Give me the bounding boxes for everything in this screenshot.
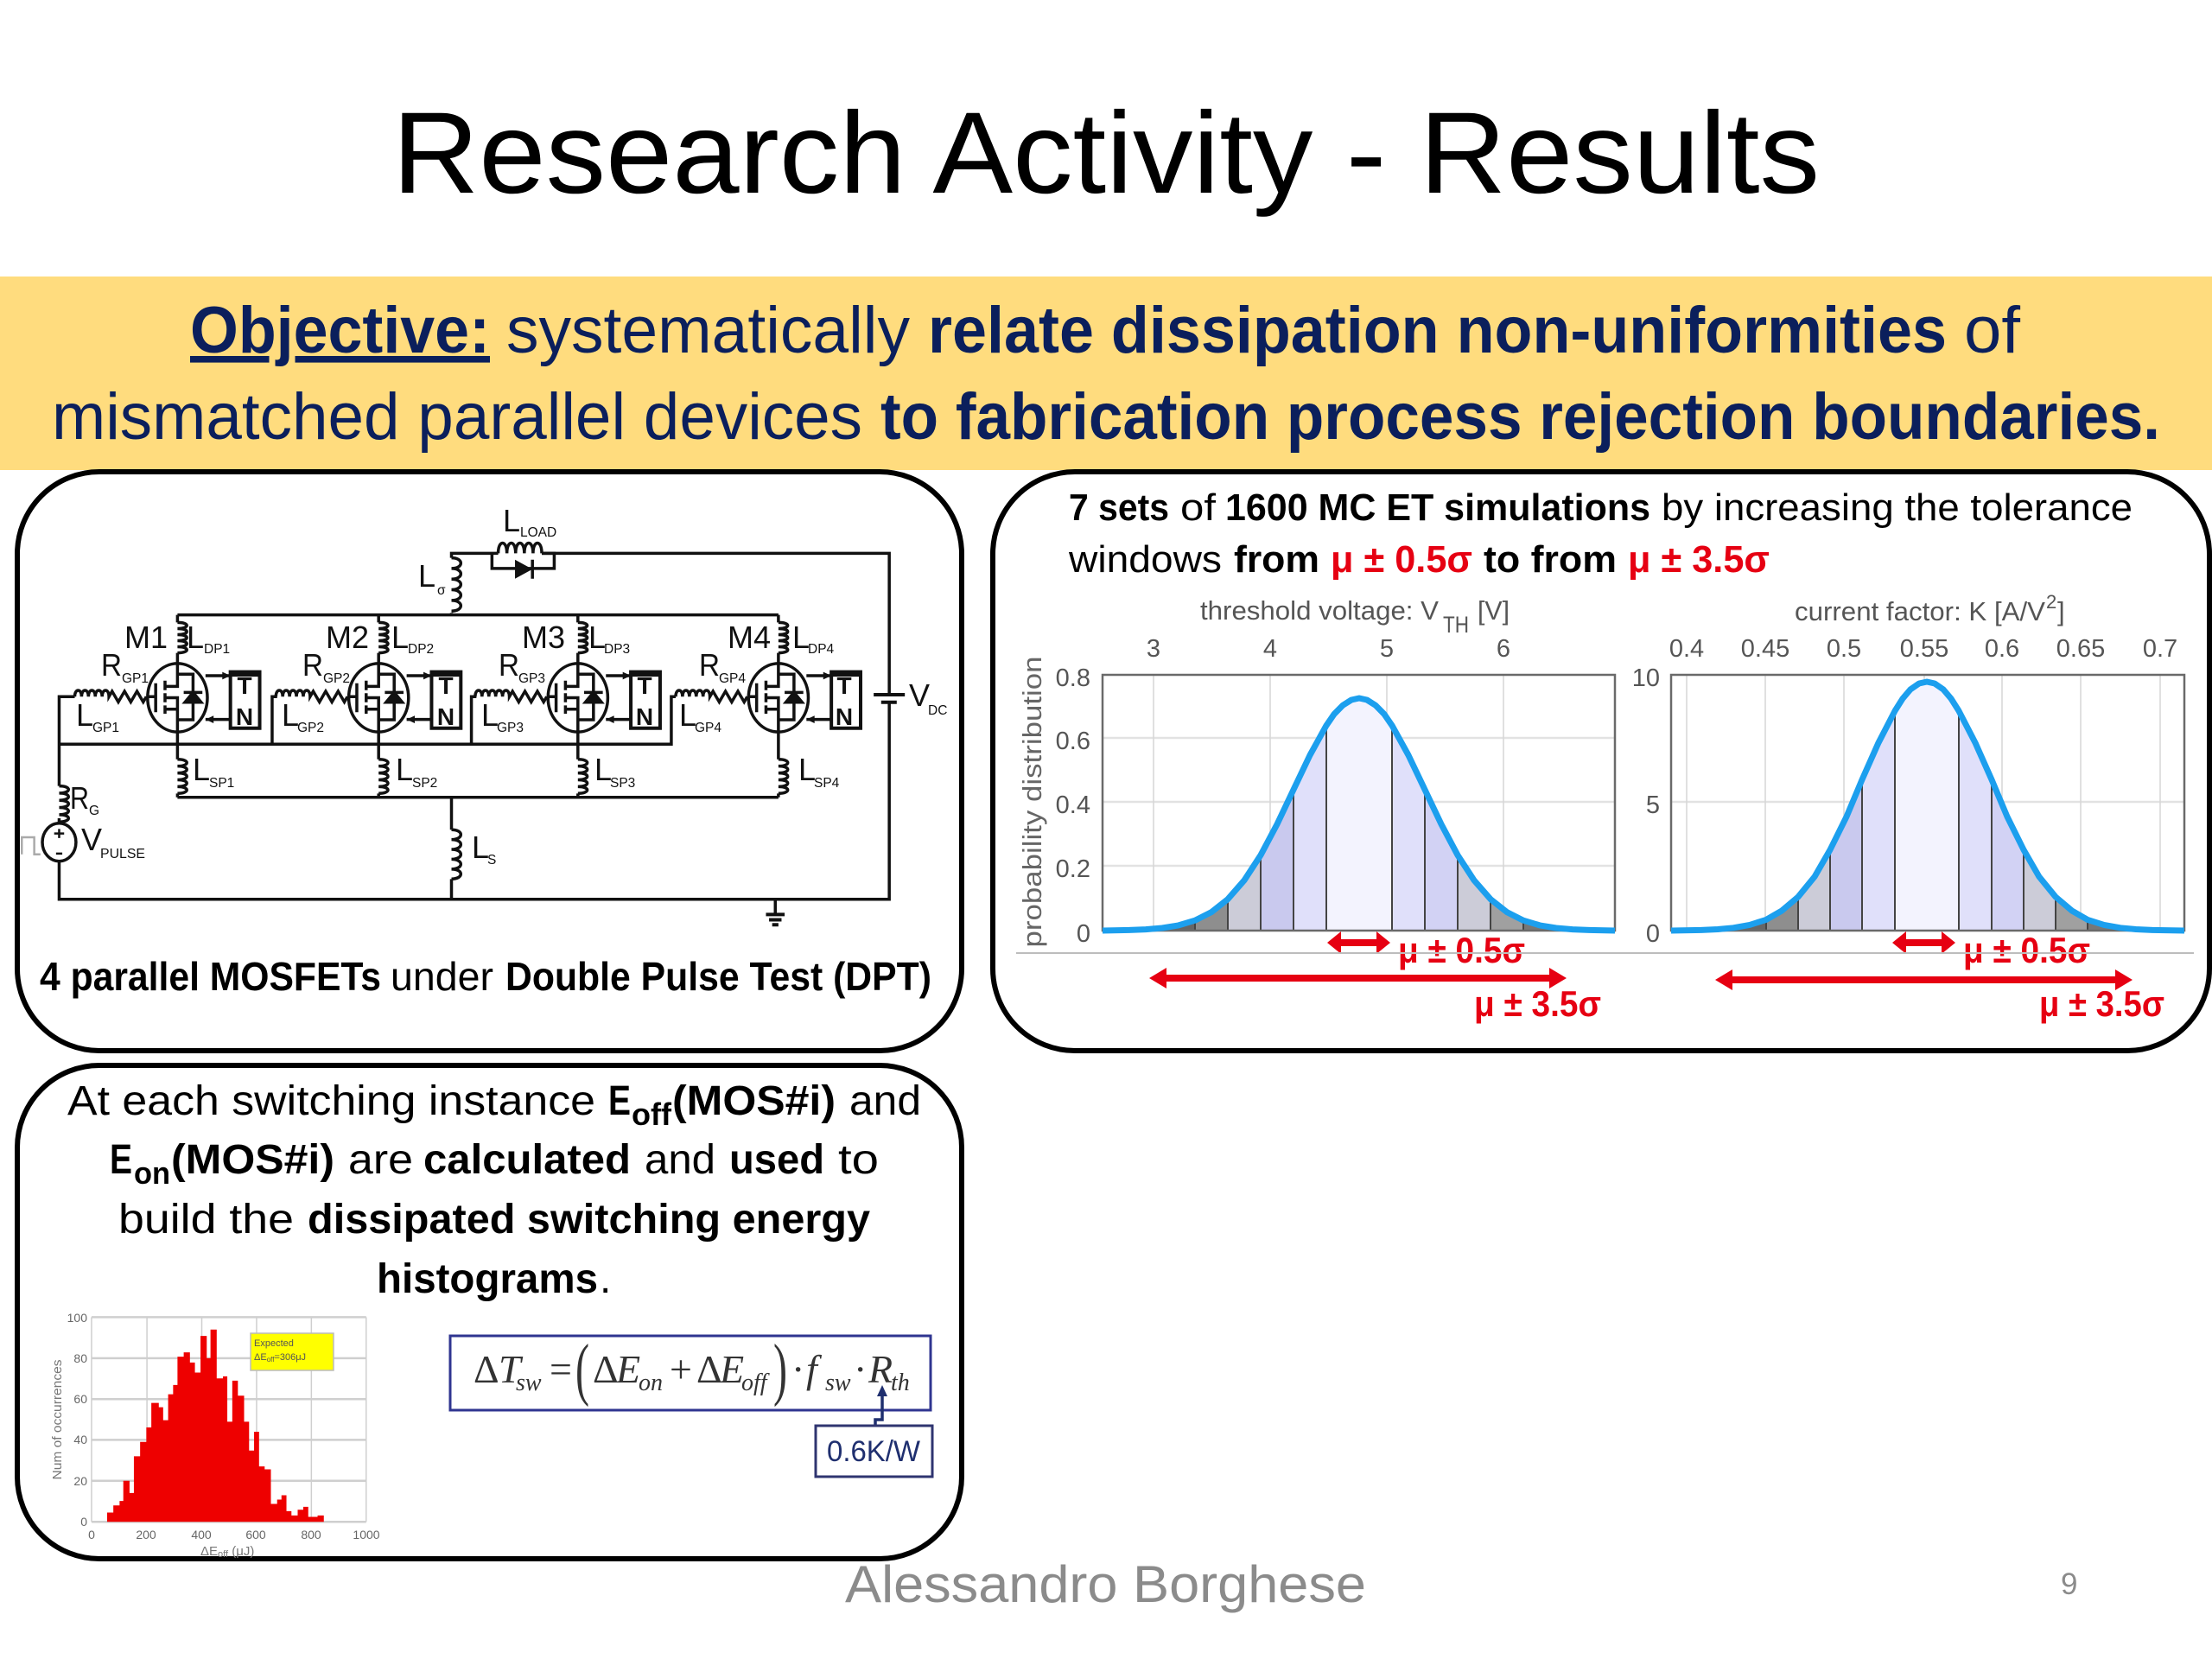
histogram bars — [107, 1330, 324, 1522]
histogram x title: (μJ) — [228, 1544, 254, 1559]
circuit caption: 4 parallel MOSFETs — [40, 954, 381, 999]
gaussian curve — [1671, 682, 2184, 931]
formula box: E — [719, 1347, 744, 1391]
top axis ticks — [1147, 635, 1510, 663]
circuit labels: SP2 — [412, 776, 437, 791]
axis title: current factor: 2 — [2046, 591, 2056, 613]
circuit labels: L — [391, 620, 409, 655]
panel frame — [993, 472, 2209, 1051]
histogram y ticks: 40 — [73, 1433, 87, 1446]
top axis ticks: 0.4 — [1669, 635, 1704, 663]
formula box: off — [741, 1370, 770, 1396]
circuit labels: L — [282, 697, 299, 733]
panel description: dissipated switching energy — [308, 1197, 870, 1243]
objective text: to fabrication process rejection boundaries. — [880, 380, 2160, 454]
histogram grid — [92, 1317, 366, 1522]
circuit labels: L — [588, 620, 606, 655]
circuit labels: R — [499, 647, 519, 683]
y axis ticks: 10 — [1632, 664, 1660, 692]
distribution bands — [1162, 698, 1556, 931]
y axis ticks: 5 — [1646, 791, 1660, 819]
panel description: μ ± 3.5σ — [1628, 538, 1770, 581]
banner: objective — [0, 276, 2212, 470]
histogram x ticks — [88, 1528, 380, 1541]
circuit labels: GP1 — [122, 671, 149, 686]
formula box: ) — [773, 1332, 787, 1408]
objective text: systematically — [506, 294, 910, 367]
panel description: to from — [1484, 538, 1617, 581]
histogram x ticks: 1000 — [353, 1528, 380, 1541]
panel frame — [17, 472, 962, 1051]
y axis ticks: 0.4 — [1056, 791, 1090, 819]
histogram y ticks — [67, 1311, 87, 1529]
panel description: At each switching instance — [67, 1078, 595, 1124]
plot frame — [1671, 675, 2184, 931]
circuit labels — [70, 503, 947, 868]
y axis ticks: 0 — [1077, 920, 1090, 948]
label: 3.5 sigma: μ ± 3.5σ — [2039, 983, 2164, 1024]
panel description — [67, 1078, 921, 1302]
circuit labels: T — [237, 672, 252, 699]
formula box: · — [854, 1347, 867, 1391]
histogram x title: ΔE — [200, 1544, 218, 1559]
arrow: Rth annotation — [875, 1385, 887, 1426]
panel description: 7 sets — [1069, 486, 1169, 529]
circuit labels: GP2 — [297, 721, 324, 735]
top axis ticks: 6 — [1497, 635, 1510, 663]
title: Research Activity - Results — [392, 89, 1820, 218]
circuit labels: GP3 — [497, 721, 524, 735]
panel description: E — [608, 1078, 631, 1124]
circuit labels: T — [836, 672, 852, 699]
circuit labels: M4 — [728, 620, 771, 655]
chart: energy histogram — [50, 1311, 380, 1560]
panel description: 1600 MC ET simulations — [1225, 486, 1650, 529]
chart: threshold voltage distribution — [1017, 595, 1615, 1024]
histogram x ticks: 400 — [191, 1528, 212, 1541]
chart: current factor distribution — [1632, 591, 2184, 1024]
circuit labels: L — [679, 697, 696, 733]
circuit labels: GP1 — [92, 721, 119, 735]
footer: page number: 9 — [2061, 1567, 2077, 1601]
circuit labels: T — [637, 672, 652, 699]
circuit labels: L — [396, 752, 413, 787]
formula box: R — [868, 1347, 893, 1391]
circuit labels: GP4 — [695, 721, 721, 735]
circuit labels: R — [302, 647, 323, 683]
histogram y ticks: 20 — [73, 1474, 87, 1488]
top axis ticks: 0.6 — [1985, 635, 2019, 663]
circuit labels: DP3 — [604, 642, 630, 657]
panel description: to — [838, 1137, 879, 1183]
formula box: sw — [825, 1370, 851, 1396]
grid — [1103, 675, 1615, 931]
panel: Monte Carlo simulations — [993, 472, 2209, 1051]
circuit labels: R — [699, 647, 720, 683]
panel description: . — [600, 1256, 611, 1302]
histogram x title: off — [218, 1549, 229, 1560]
chart baseline rule — [1016, 952, 2194, 954]
circuit labels: M2 — [326, 620, 369, 655]
gaussian curve — [1103, 698, 1615, 931]
formula box — [450, 1332, 931, 1410]
legend note: off — [267, 1356, 275, 1363]
objective text: of — [1964, 294, 2021, 367]
y axis ticks: 0.8 — [1056, 664, 1090, 692]
circuit labels: DC — [928, 703, 947, 718]
formula box: E — [615, 1347, 640, 1391]
formula box: = — [550, 1347, 572, 1391]
circuit caption: Double Pulse Test (DPT) — [505, 954, 931, 999]
value box: thermal resistance: 0.6K/W — [827, 1435, 920, 1468]
circuit labels: L — [798, 752, 816, 787]
circuit labels: N — [437, 703, 454, 730]
panel description: are — [348, 1137, 413, 1183]
circuit labels: M3 — [522, 620, 565, 655]
axis title: threshold voltage — [1200, 595, 1510, 638]
circuit labels: S — [487, 853, 496, 868]
circuit labels: SP3 — [610, 776, 635, 791]
circuit labels: L — [481, 697, 499, 733]
value box: thermal resistance — [816, 1426, 932, 1477]
label: 3.5 sigma: μ ± 3.5σ — [1474, 983, 1601, 1024]
circuit labels: N — [236, 703, 253, 730]
top axis ticks: 0.55 — [1900, 635, 1948, 663]
arrow: 3.5 sigma — [1149, 968, 1567, 988]
circuit labels: V — [909, 677, 930, 713]
y axis ticks: 0.6 — [1056, 728, 1090, 755]
axis title: threshold voltage: TH — [1443, 612, 1469, 638]
circuit labels: L — [76, 697, 93, 733]
circuit labels: R — [101, 647, 122, 683]
top axis ticks: 0.7 — [2143, 635, 2177, 663]
y axis ticks — [1056, 664, 1090, 948]
formula box: on — [639, 1370, 663, 1396]
y axis ticks: 0 — [1646, 920, 1660, 948]
circuit labels: SP1 — [209, 776, 234, 791]
panel: switching energy — [17, 1065, 962, 1560]
arrow: 0.5 sigma — [1892, 931, 1955, 954]
top axis ticks — [1669, 635, 2177, 663]
legend note — [251, 1333, 334, 1370]
circuit labels: L — [418, 558, 435, 594]
top axis ticks: 0.5 — [1827, 635, 1861, 663]
distribution bands — [1733, 682, 2120, 931]
circuit labels: LOAD — [520, 525, 556, 540]
circuit labels: L — [472, 830, 489, 865]
panel description: build the — [118, 1197, 294, 1243]
axis title: current factor: current factor: K [A/V — [1795, 596, 2045, 626]
panel description — [1068, 486, 2133, 581]
circuit labels: GP2 — [323, 671, 350, 686]
histogram y title: Num of occurrences — [50, 1360, 65, 1479]
panel description: windows — [1068, 538, 1222, 581]
histogram y ticks: 0 — [80, 1515, 87, 1529]
circuit labels: L — [792, 620, 810, 655]
objective text: mismatched parallel devices — [52, 380, 862, 454]
formula box: + — [670, 1347, 692, 1391]
y axis ticks — [1632, 664, 1660, 948]
formula box: sw — [516, 1370, 542, 1396]
axis title: threshold voltage: threshold voltage: V — [1200, 595, 1439, 626]
top axis ticks: 4 — [1263, 635, 1277, 663]
panel: circuit — [17, 472, 962, 1051]
panel description: and — [645, 1137, 715, 1183]
panel description: (MOS#i) — [171, 1137, 334, 1183]
grid — [1671, 675, 2184, 931]
circuit labels: N — [836, 703, 853, 730]
circuit labels: R — [70, 780, 89, 816]
panel description: histograms — [377, 1256, 598, 1302]
formula box: ( — [575, 1332, 589, 1408]
panel description: on — [134, 1155, 170, 1191]
circuit labels: DP1 — [204, 642, 230, 657]
histogram y ticks: 80 — [73, 1351, 87, 1365]
circuit labels: GP4 — [719, 671, 746, 686]
legend note: ΔE — [254, 1352, 267, 1363]
objective text: Objective: — [190, 294, 490, 367]
circuit caption — [40, 954, 931, 999]
histogram x ticks: 0 — [88, 1528, 95, 1541]
circuit labels: PULSE — [100, 847, 145, 861]
banner background — [0, 276, 2212, 470]
formula box: Δ — [593, 1347, 619, 1391]
circuit labels: SP4 — [814, 776, 840, 791]
axis title: threshold voltage: [V] — [1478, 595, 1510, 626]
panel description: μ ± 0.5σ — [1331, 538, 1472, 581]
circuit labels: σ — [437, 583, 446, 598]
circuit labels: DP4 — [808, 642, 835, 657]
top axis ticks: 0.65 — [2056, 635, 2105, 663]
panel description: of — [1180, 486, 1217, 529]
panel description: used — [729, 1137, 824, 1183]
panel frame — [17, 1065, 962, 1559]
circuit labels: L — [193, 752, 210, 787]
histogram x ticks: 200 — [136, 1528, 156, 1541]
panel description: by increasing the tolerance — [1662, 486, 2133, 529]
circuit labels: M1 — [124, 620, 168, 655]
top axis ticks: 3 — [1147, 635, 1160, 663]
panel description: and — [849, 1078, 921, 1124]
circuit labels: T — [438, 672, 454, 699]
formula box: · — [791, 1347, 804, 1391]
circuit labels: L — [503, 503, 520, 538]
footer: author: Alessandro Borghese — [845, 1555, 1366, 1613]
panel description: from — [1234, 538, 1319, 581]
legend note: =306μJ — [274, 1352, 306, 1363]
circuit labels: G — [89, 804, 99, 818]
circuit labels: N — [636, 703, 653, 730]
y axis title: probability distribution — [1017, 657, 1047, 947]
formula box: th — [891, 1370, 910, 1396]
circuit schematic — [22, 543, 905, 925]
circuit labels: L — [594, 752, 612, 787]
formula box: T — [499, 1347, 524, 1391]
circuit caption: under — [391, 954, 493, 999]
label: 0.5 sigma: μ ± 0.5σ — [1963, 930, 2090, 970]
circuit labels: DP2 — [408, 642, 434, 657]
histogram y ticks: 60 — [73, 1392, 87, 1406]
plot frame — [1103, 675, 1615, 931]
formula box: Δ — [474, 1347, 499, 1391]
objective text — [52, 294, 2160, 454]
panel description: E — [110, 1137, 132, 1183]
histogram x ticks: 800 — [301, 1528, 321, 1541]
panel description: (MOS#i) — [672, 1078, 836, 1124]
legend note: Expected — [254, 1338, 294, 1349]
top axis ticks: 0.45 — [1741, 635, 1789, 663]
circuit labels: GP3 — [518, 671, 545, 686]
panel description: off — [632, 1096, 672, 1132]
histogram x ticks: 600 — [245, 1528, 266, 1541]
axis title: current factor: ] — [2057, 596, 2065, 626]
circuit labels: L — [187, 620, 204, 655]
panel description: calculated — [423, 1137, 631, 1183]
top axis ticks: 5 — [1380, 635, 1394, 663]
formula box: Δ — [696, 1347, 722, 1391]
label: 0.5 sigma: μ ± 0.5σ — [1398, 930, 1525, 970]
arrow: 0.5 sigma — [1327, 931, 1390, 954]
objective text: relate dissipation non-uniformities — [928, 294, 1947, 367]
histogram y ticks: 100 — [67, 1311, 87, 1325]
arrow: 3.5 sigma — [1715, 969, 2133, 990]
formula box: f — [806, 1347, 823, 1391]
y axis ticks: 0.2 — [1056, 855, 1090, 883]
circuit labels: V — [81, 822, 102, 857]
